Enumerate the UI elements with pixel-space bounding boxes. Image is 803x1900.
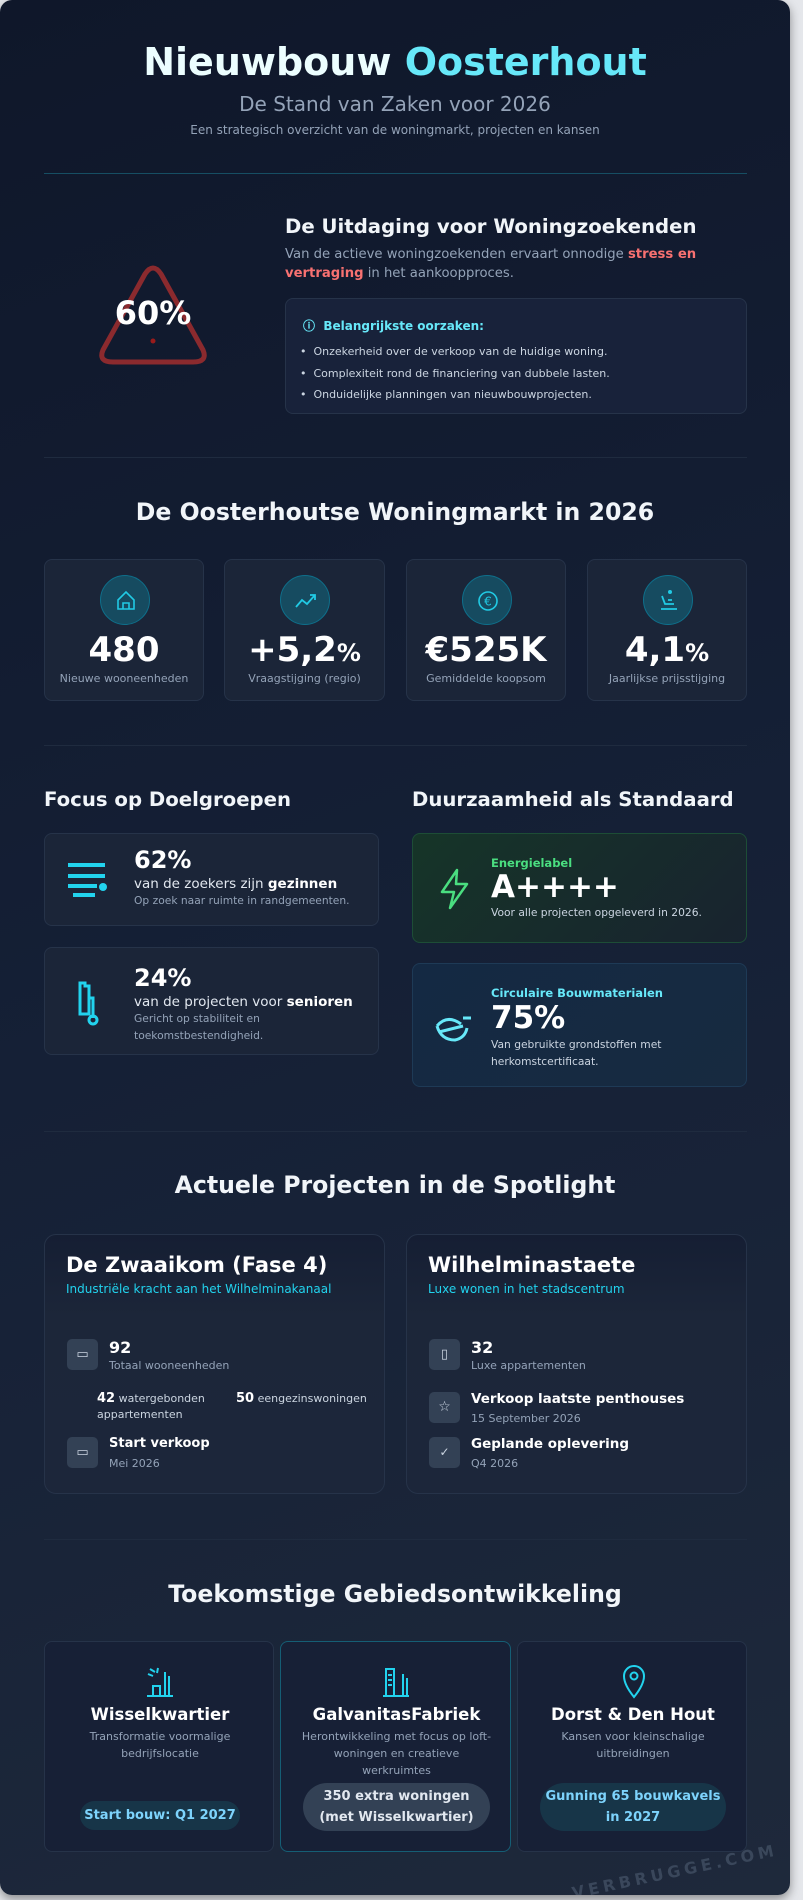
panel: GalvanitasFabriek: woningen en creatieve (334, 1747, 459, 1760)
panel: De Zwaaikom: Mei 2026 (109, 1457, 160, 1470)
panel: GalvanitasFabriek: (met Wisselkwartier) (319, 1810, 474, 1825)
panel: Dorst & Den Hout: Gunning 65 bouwkavels (546, 1789, 720, 1804)
panel: causes: • Complexiteit rond de financiering van dubbele lasten. (300, 366, 610, 380)
panel: Wilhelminastaete: Wilhelminastaete (428, 1253, 635, 1277)
heading: duurzaamheid: Duurzaamheid als Standaard (412, 788, 734, 811)
heading: market: De Oosterhoutse Woningmarkt in 2026 (136, 498, 654, 526)
panel: De Zwaaikom: Totaal wooneenheden (109, 1359, 229, 1372)
panel: Wilhelminastaete: Luxe wonen in het stadscentrum (428, 1282, 625, 1296)
panel: circulaire materialen: Van gebruikte grondstoffen met herkomstcertificaat. (491, 1038, 661, 1068)
tagline: Een strategisch overzicht van de woningmarkt, projecten en kansen (190, 123, 600, 137)
stat: +5,2%: Vraagstijging (regio) (248, 672, 361, 685)
panel: De Zwaaikom: 92 (109, 1338, 131, 1357)
panel: Dorst & Den Hout (517, 1641, 747, 1852)
panel: Wilhelminastaete: ✓ (439, 1445, 450, 1459)
panel: gezinnen (44, 833, 379, 926)
panel: energielabel: A++++ (491, 869, 619, 905)
heading: projecten: Actuele Projecten in de Spotlight (175, 1171, 615, 1199)
panel: Wisselkwartier: Start bouw: Q1 2027 (84, 1808, 236, 1823)
panel: causes: ⓘ Belangrijkste oorzaken: (303, 319, 484, 333)
panel: Wilhelminastaete: Q4 2026 (471, 1457, 518, 1470)
panel: De Zwaaikom: De Zwaaikom (Fase 4) (66, 1253, 327, 1277)
panel: Dorst & Den Hout: Dorst & Den Hout (551, 1705, 715, 1724)
panel: De Zwaaikom: 42 watergebonden appartementen (97, 1391, 205, 1421)
stat: 4,1%: 4,1% (625, 630, 709, 670)
panel: energielabel (412, 833, 747, 943)
stat: 480 (44, 559, 204, 701)
panel: GalvanitasFabriek: Herontwikkeling met focus op loft- (302, 1730, 491, 1743)
panel: gezinnen: van de zoekers zijn gezinnen (134, 876, 337, 892)
stat: €525K (406, 559, 566, 701)
panel: circulaire materialen (412, 963, 747, 1087)
panel: gezinnen: 62% (134, 846, 191, 874)
heading: challenge: De Uitdaging voor Woningzoekenden (285, 215, 696, 238)
stat: €525K: € (484, 594, 492, 608)
panel: causes: • Onduidelijke planningen van nieuwbouwprojecten. (300, 388, 592, 401)
heading: gebiedsontwikkeling: Toekomstige Gebiedsontwikkeling (168, 1580, 622, 1608)
icon: warning triangle with 60%: 60% (115, 294, 191, 332)
paragraph: challenge: Van de actieve woningzoekenden ervaart onnodige stress en vertraging in het aankoopproces. (285, 247, 696, 281)
panel: GalvanitasFabriek: 350 extra woningen (323, 1789, 470, 1804)
panel: De Zwaaikom: Start verkoop (109, 1436, 210, 1451)
stat: +5,2%: +5,2% (248, 630, 361, 670)
panel: Wilhelminastaete: 32 (471, 1338, 493, 1357)
panel: De Zwaaikom: ▭ (76, 1445, 89, 1460)
panel: gezinnen: Op zoek naar ruimte in randgemeenten. (134, 894, 350, 907)
heading: doelgroepen: Focus op Doelgroepen (44, 788, 291, 811)
stat: €525K: €525K (426, 630, 546, 670)
panel: Wilhelminastaete: 15 September 2026 (471, 1412, 581, 1425)
stat: €525K: Gemiddelde koopsom (426, 672, 546, 685)
panel: circulaire materialen: 75% (491, 1000, 565, 1036)
panel: senioren (44, 947, 379, 1055)
icon: warning triangle with 60% (99, 266, 207, 364)
panel: circulaire materialen: Circulaire Bouwmaterialen (491, 986, 663, 1000)
panel: De Zwaaikom: 50 eengezinswoningen (236, 1391, 367, 1406)
panel: Wilhelminastaete: Verkoop laatste penthouses (471, 1391, 684, 1407)
stat: +5,2% (224, 559, 385, 701)
panel: Wilhelminastaete: Geplande oplevering (471, 1436, 629, 1452)
panel: Dorst & Den Hout: Kansen voor kleinschalige uitbreidingen (561, 1730, 705, 1760)
panel: causes: • Onzekerheid over de verkoop van de huidige woning. (300, 345, 607, 358)
title: Nieuwbouw Oosterhout (143, 40, 647, 84)
panel: senioren: 24% (134, 964, 191, 992)
panel: Wisselkwartier: Transformatie voormalige bedrijfslocatie (90, 1730, 230, 1760)
panel: Dorst & Den Hout: in 2027 (606, 1810, 660, 1825)
panel: GalvanitasFabriek: GalvanitasFabriek (313, 1705, 480, 1724)
panel: GalvanitasFabriek: werkruimtes (362, 1764, 431, 1777)
panel: senioren: van de projecten voor senioren (134, 994, 353, 1010)
stat: 4,1% (587, 559, 747, 701)
panel: senioren: Gericht op stabiliteit en toekomstbestendigheid. (134, 1012, 263, 1042)
panel: Wilhelminastaete: Luxe appartementen (471, 1359, 586, 1372)
panel: causes (285, 298, 747, 414)
panel: De Zwaaikom (44, 1234, 385, 1494)
panel: energielabel: Voor alle projecten opgeleverd in 2026. (491, 906, 702, 919)
panel: energielabel: Energielabel (491, 856, 572, 870)
panel: Wilhelminastaete: ▯ (441, 1347, 448, 1362)
panel: Wilhelminastaete (406, 1234, 747, 1494)
panel: De Zwaaikom: Industriële kracht aan het Wilhelminakanaal (66, 1282, 331, 1296)
stat: 480: 480 (88, 630, 159, 670)
panel: Wisselkwartier (44, 1641, 274, 1852)
panel: De Zwaaikom: ▭ (76, 1347, 89, 1362)
panel: Wisselkwartier: Wisselkwartier (91, 1705, 229, 1724)
panel: GalvanitasFabriek (280, 1641, 511, 1852)
stat: 4,1%: Jaarlijkse prijsstijging (609, 672, 725, 685)
panel: Wilhelminastaete: ☆ (438, 1399, 451, 1415)
stat: 480: Nieuwe wooneenheden (60, 672, 188, 685)
subtitle: De Stand van Zaken voor 2026 (239, 92, 551, 116)
